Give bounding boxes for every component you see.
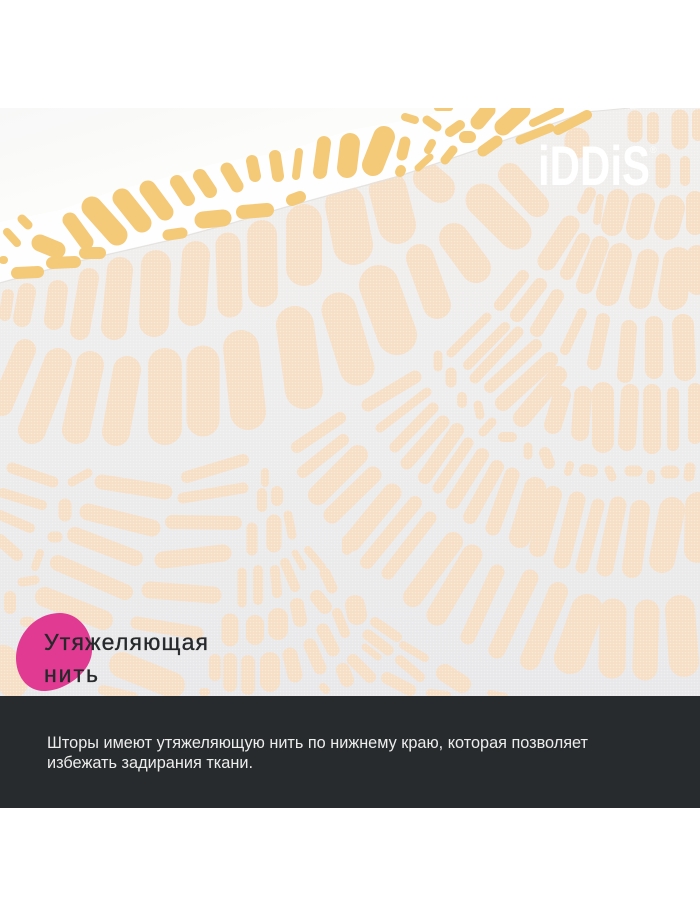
hem lower edge <box>0 108 630 283</box>
heading <box>44 634 207 682</box>
description text <box>47 734 588 772</box>
hem band <box>328 164 433 195</box>
logo: IDDIS <box>541 144 656 186</box>
heading: Утяжеляющая <box>44 629 208 655</box>
description text: избежать задирания ткани. <box>47 754 253 772</box>
heading: нить <box>44 661 98 687</box>
description panel <box>0 696 700 808</box>
printed peach pattern <box>0 115 698 697</box>
logo: IDDIS: iDDiS <box>538 134 650 197</box>
fabric base <box>0 108 700 696</box>
fabric weave texture <box>0 108 700 696</box>
accent: pink blob <box>16 613 92 691</box>
folded curtain, plain back side <box>0 108 440 222</box>
logo: IDDIS: ® <box>650 145 657 155</box>
description text: Шторы имеют утяжеляющую нить по нижнему краю, которая позволяет <box>47 734 588 752</box>
photo: curtain fabric <box>0 108 700 697</box>
gold stripes on the hem <box>3 108 587 273</box>
